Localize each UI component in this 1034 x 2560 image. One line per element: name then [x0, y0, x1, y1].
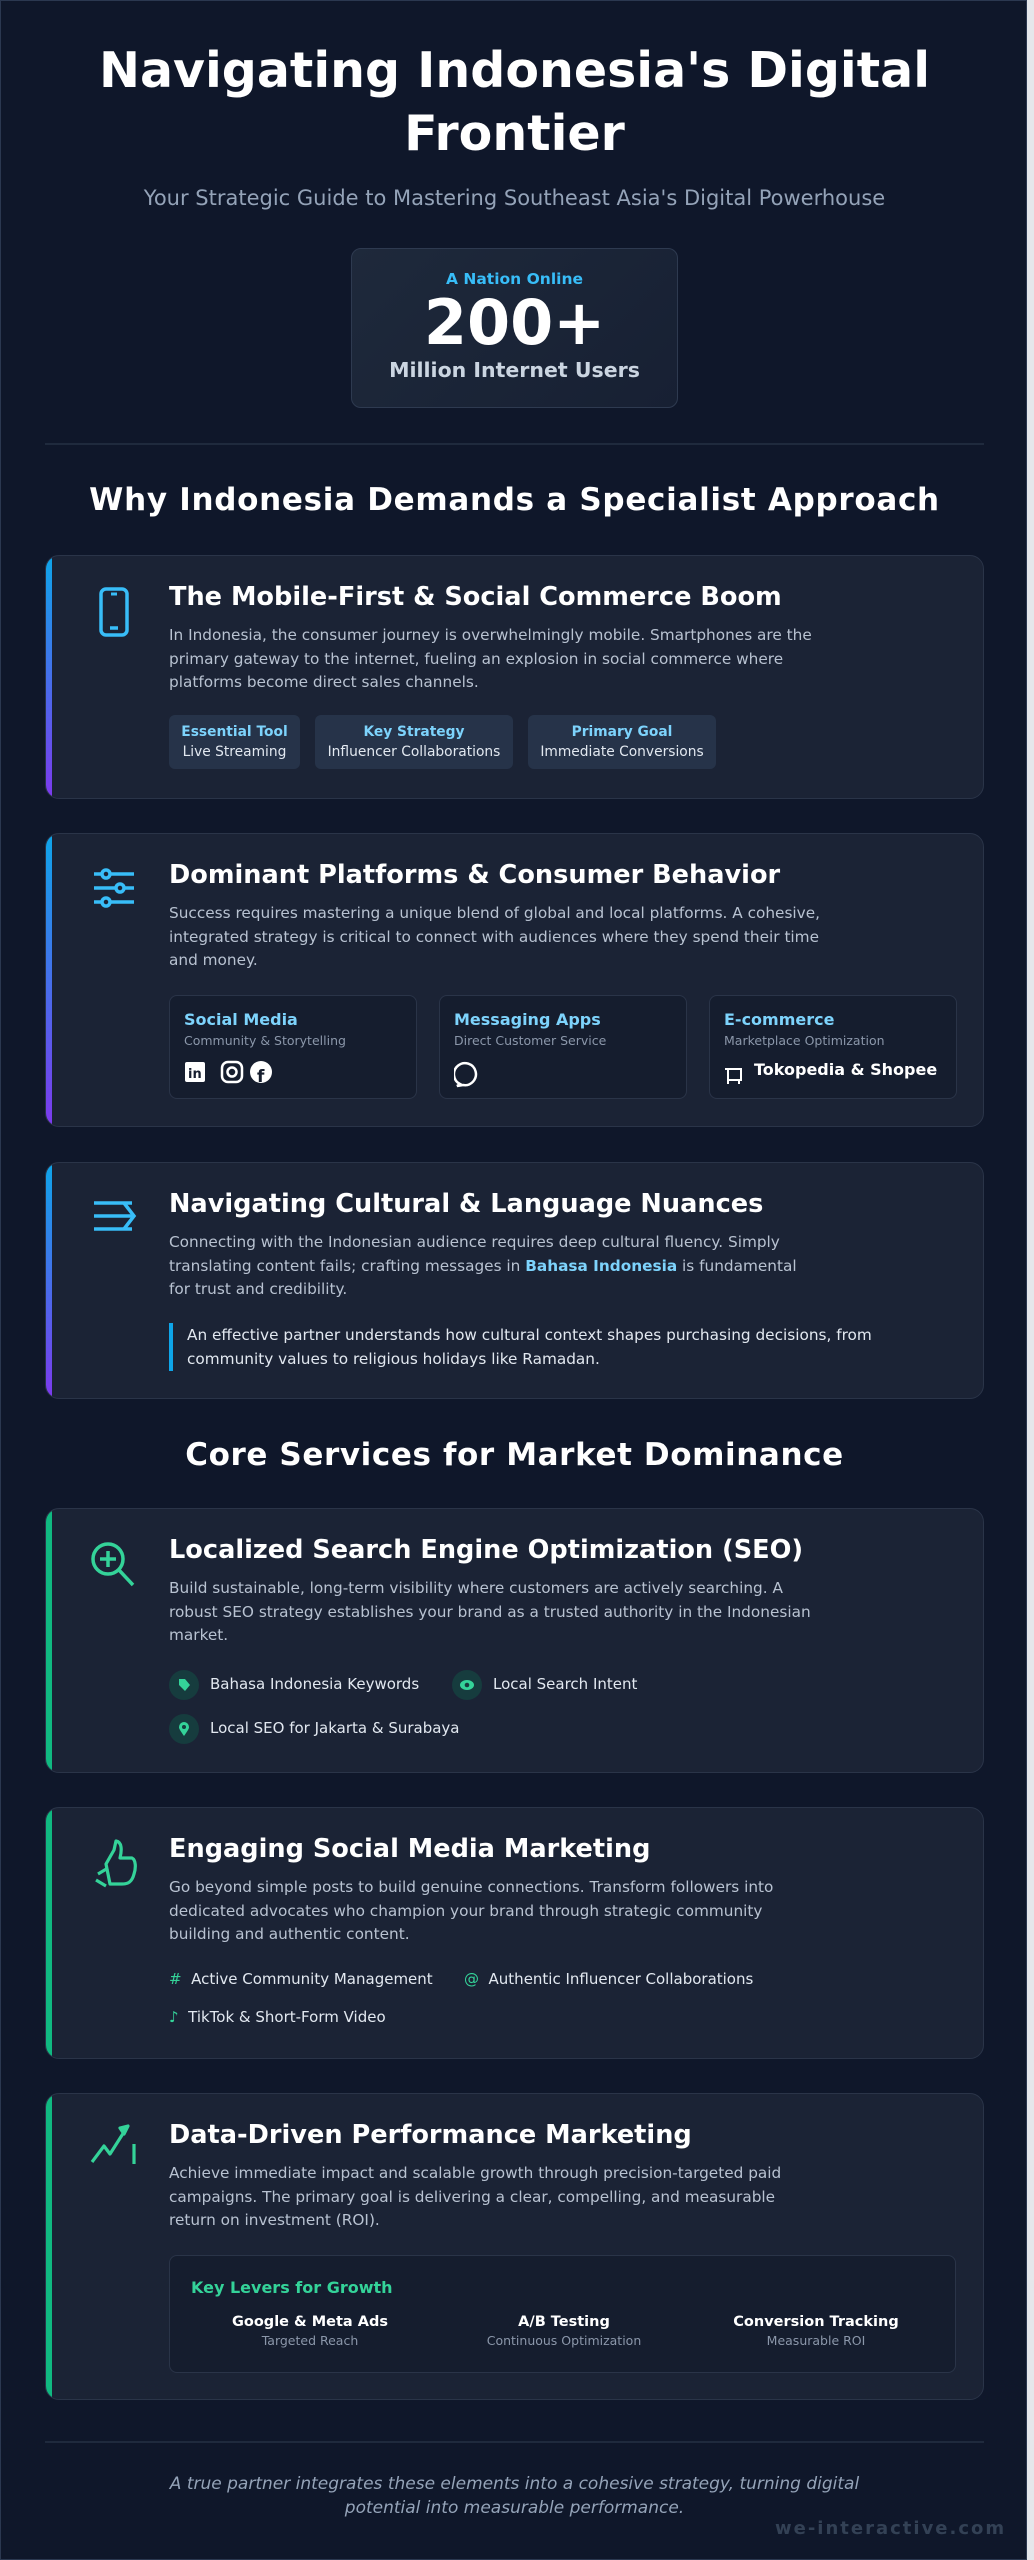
icons: social: in — [188, 1067, 202, 1082]
body: Connecting with the Indonesian audience requires deep cultural fluency. Simply — [169, 1233, 780, 1251]
heading: core services: Core Services for Market Dominance — [185, 1437, 844, 1473]
feature: keywords: Bahasa Indonesia Keywords — [210, 1675, 419, 1693]
footer quote: A true partner integrates these elements into a cohesive strategy, turning digital — [170, 2474, 859, 2494]
sub: social media: Community & Storytelling — [184, 1033, 346, 1048]
icon: phone — [99, 587, 129, 637]
panel: performance marketing — [45, 2093, 984, 2400]
panel: mobile-first — [45, 555, 984, 799]
sub: messaging apps: Messaging Apps — [454, 1010, 601, 1029]
lever: ads — [232, 2314, 388, 2348]
body: campaigns. The primary goal is delivering a clear, compelling, and measurable — [169, 2188, 775, 2206]
feature: local seo: Local SEO for Jakarta & Surabaya — [210, 1719, 460, 1737]
icon: cart — [725, 1068, 742, 1084]
body: Go beyond simple posts to build genuine connections. Transform followers into — [169, 1878, 773, 1896]
body: and money. — [169, 951, 258, 969]
body: Achieve immediate impact and scalable growth through precision-targeted paid — [169, 2164, 781, 2182]
body — [169, 2164, 781, 2229]
lever: ads: Targeted Reach — [262, 2333, 358, 2348]
sub: social media: Social Media — [184, 1010, 298, 1029]
brand mark: we-interactive.com — [775, 2518, 1006, 2539]
stat box: 200+ — [424, 286, 605, 359]
key levers box: Key Levers for Growth — [191, 2278, 393, 2297]
chip: key strategy — [315, 715, 513, 769]
sub: ecommerce: Tokopedia & Shopee — [754, 1060, 937, 1079]
sub: ecommerce: Marketplace Optimization — [724, 1033, 885, 1048]
feature: search intent — [452, 1670, 638, 1700]
callout quote: community values to religious holidays like Ramadan. — [187, 1350, 600, 1368]
title: Frontier — [404, 105, 625, 162]
body — [169, 626, 812, 691]
panel: social media marketing — [45, 1807, 984, 2059]
body: building and authentic content. — [169, 1925, 410, 1943]
body: Build sustainable, long-term visibility where customers are actively searching. A — [169, 1579, 783, 1597]
body: integrated strategy is critical to connect with audiences where they spend their time — [169, 928, 819, 946]
body — [169, 904, 820, 969]
feature: local seo — [169, 1714, 460, 1744]
chip: key strategy: Influencer Collaborations — [328, 744, 500, 760]
key levers box — [169, 2255, 956, 2373]
card title: Data-Driven Performance Marketing — [169, 2120, 692, 2150]
sub: ecommerce: E-commerce — [724, 1010, 834, 1029]
body: translating content fails; crafting messages in Bahasa Indonesia is fundamental — [169, 1257, 797, 1275]
callout quote: An effective partner understands how cultural context shapes purchasing decisions, from — [187, 1326, 872, 1344]
icon: arrows — [94, 1201, 136, 1231]
panel: seo — [45, 1508, 984, 1773]
stat box: A Nation Online — [446, 270, 583, 288]
feature: influencer: @ Authentic Influencer Collaborations — [464, 1970, 753, 1988]
chip: essential tool: Live Streaming — [183, 744, 286, 760]
lever: tracking: Conversion Tracking — [733, 2314, 899, 2330]
feature: community: # Active Community Management — [169, 1970, 433, 1988]
body — [169, 1579, 811, 1644]
stat box — [351, 248, 678, 408]
body: Success requires mastering a unique blend of global and local platforms. A cohesive, — [169, 904, 820, 922]
card title: Navigating Cultural & Language Nuances — [169, 1189, 763, 1219]
icon: thumbs up — [95, 1839, 137, 1888]
feature: search intent: Local Search Intent — [493, 1675, 637, 1693]
chip: essential tool: Essential Tool — [181, 724, 288, 740]
panel: cultural — [45, 1162, 984, 1399]
body: dedicated advocates who champion your brand through strategic community — [169, 1902, 762, 1920]
subtitle: Your Strategic Guide to Mastering Southeast Asia's Digital Powerhouse — [144, 186, 885, 210]
lever: tracking: Measurable ROI — [767, 2333, 865, 2348]
body: platforms become direct sales channels. — [169, 673, 479, 691]
title — [99, 42, 930, 162]
icon: chart — [90, 2124, 136, 2164]
lever: ads: Google & Meta Ads — [232, 2314, 388, 2330]
sub: ecommerce — [709, 995, 957, 1099]
icon: sliders — [94, 868, 134, 908]
sub: social media — [169, 995, 417, 1099]
chip: primary goal: Primary Goal — [572, 724, 672, 740]
title: Navigating Indonesia's Digital — [99, 42, 930, 99]
sub: messaging apps — [439, 995, 687, 1099]
body: robust SEO strategy establishes your brand as a trusted authority in the Indonesian — [169, 1603, 811, 1621]
body — [169, 1233, 797, 1298]
footer quote — [168, 2474, 860, 2518]
footer quote: potential into measurable performance. — [345, 2498, 684, 2518]
icon: search plus — [91, 1542, 134, 1586]
card title: Engaging Social Media Marketing — [169, 1834, 650, 1864]
lever: tracking — [733, 2314, 899, 2348]
body — [169, 1878, 773, 1943]
lever: ab: Continuous Optimization — [487, 2333, 641, 2348]
body: In Indonesia, the consumer journey is overwhelmingly mobile. Smartphones are the — [169, 626, 812, 644]
body: market. — [169, 1626, 228, 1644]
chip: essential tool — [169, 715, 300, 769]
feature: tiktok: ♪ TikTok & Short-Form Video — [169, 2008, 386, 2026]
body: primary gateway to the internet, fueling an explosion in social commerce where — [169, 650, 783, 668]
lever: ab — [487, 2314, 641, 2348]
lever: ab: A/B Testing — [518, 2314, 610, 2330]
feature: keywords — [169, 1670, 419, 1700]
callout quote — [169, 1323, 872, 1371]
heading: why indonesia: Why Indonesia Demands a Specialist Approach — [89, 482, 940, 518]
card title: Dominant Platforms & Consumer Behavior — [169, 860, 780, 890]
chip: primary goal — [528, 715, 716, 769]
chip: primary goal: Immediate Conversions — [540, 744, 704, 760]
stat box: Million Internet Users — [389, 358, 640, 382]
panel: platforms — [45, 833, 984, 1127]
chip: key strategy: Key Strategy — [363, 724, 465, 740]
body: return on investment (ROI). — [169, 2211, 380, 2229]
icons: social — [185, 1060, 272, 1086]
body: for trust and credibility. — [169, 1280, 347, 1298]
card title: The Mobile-First & Social Commerce Boom — [169, 582, 782, 612]
icon: chat — [454, 1062, 478, 1088]
sub: messaging apps: Direct Customer Service — [454, 1033, 606, 1048]
card title: Localized Search Engine Optimization (SEO) — [169, 1535, 803, 1565]
